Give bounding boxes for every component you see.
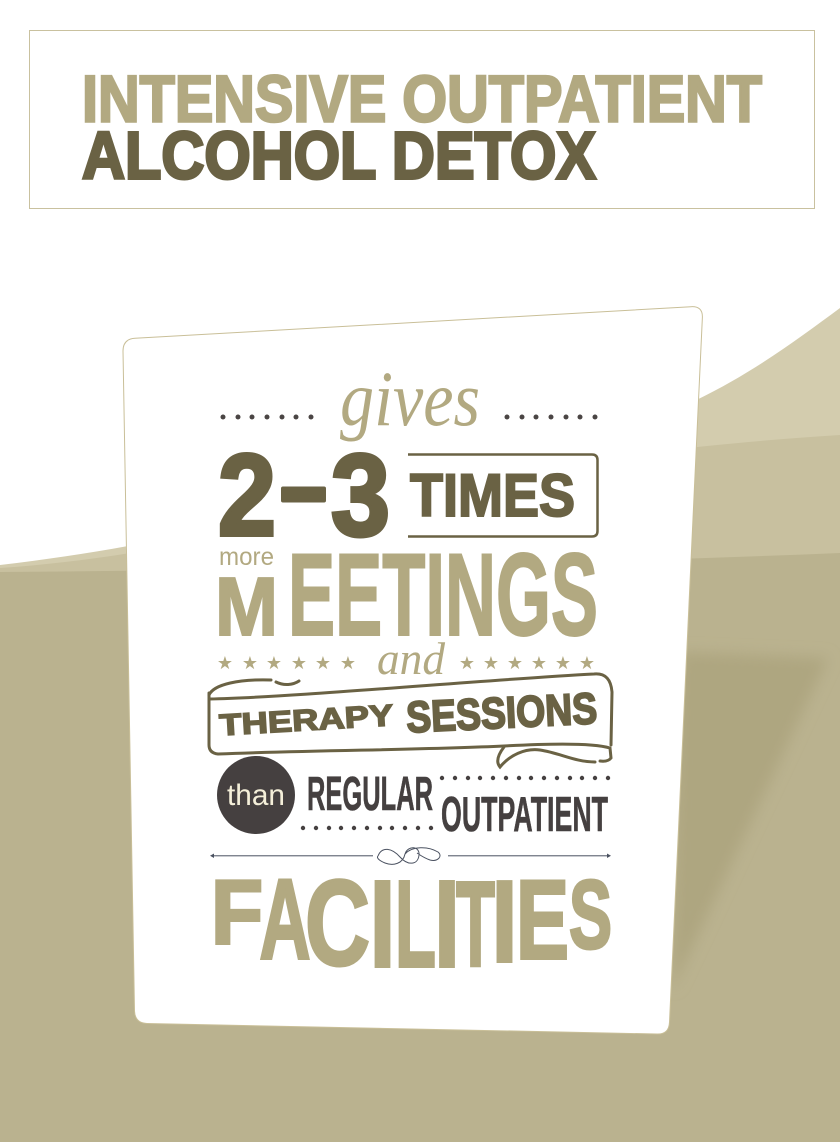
dotted rule below regular <box>301 826 433 830</box>
word: regular: REGULAR <box>307 768 433 821</box>
card shadow <box>672 652 828 990</box>
ribbon banner <box>209 674 612 767</box>
word: facilities: A <box>260 856 310 984</box>
word: facilities: E <box>516 858 569 982</box>
title line 1: INTENSIVE OUTPATIENT <box>82 62 762 136</box>
than badge: than <box>227 779 285 812</box>
word: outpatient: OUTPATIENT <box>441 788 608 842</box>
word: gives: gives <box>340 355 480 442</box>
word: meetings <box>215 529 598 660</box>
star row right: ★ <box>459 653 475 673</box>
word: facilities: I <box>370 856 396 994</box>
word: facilities <box>211 855 612 994</box>
word: facilities: T <box>456 856 495 992</box>
ribbon text: therapy: THERAPY <box>218 699 394 742</box>
arrow divider right <box>448 854 611 858</box>
word: facilities: F <box>211 862 263 964</box>
star row left: ★ <box>217 653 233 673</box>
star row left: ★ <box>242 653 258 673</box>
star row left <box>217 653 356 673</box>
star row left: ★ <box>315 653 331 673</box>
word: and: and <box>377 633 446 684</box>
star row right: ★ <box>483 653 499 673</box>
arrow divider left <box>210 854 373 858</box>
word: facilities: I <box>434 856 460 994</box>
star row left: ★ <box>291 653 307 673</box>
dotted rule right <box>504 414 598 420</box>
than badge <box>217 756 295 834</box>
word: meetings: EETINGS <box>288 529 598 660</box>
ornamental flourish <box>377 848 440 864</box>
star row right <box>459 653 595 673</box>
dotted rule left <box>220 414 314 420</box>
star row left: ★ <box>340 653 356 673</box>
word: meetings: M <box>215 560 278 653</box>
star row left: ★ <box>266 653 282 673</box>
star row right: ★ <box>531 653 547 673</box>
figure: 2-3: 2 <box>218 430 276 560</box>
figure: 2-3 <box>218 430 390 560</box>
ribbon text: sessions: SESSIONS <box>405 684 598 742</box>
word: times with frame: TIMES <box>410 462 575 529</box>
background hills <box>0 308 840 1142</box>
star row right: ★ <box>579 653 595 673</box>
title panel <box>30 30 814 208</box>
star row right: ★ <box>507 653 523 673</box>
word: facilities: C <box>305 855 370 991</box>
white poster card <box>123 307 702 1034</box>
word: facilities: I <box>492 856 518 986</box>
title line 2: ALCOHOL DETOX <box>82 118 596 194</box>
figure: 2-3: 3 <box>331 430 390 560</box>
dotted rule above outpatient <box>440 776 610 780</box>
word: more: more <box>219 543 274 571</box>
star row right: ★ <box>555 653 571 673</box>
word: facilities: S <box>569 860 612 969</box>
word: facilities: L <box>395 856 436 994</box>
